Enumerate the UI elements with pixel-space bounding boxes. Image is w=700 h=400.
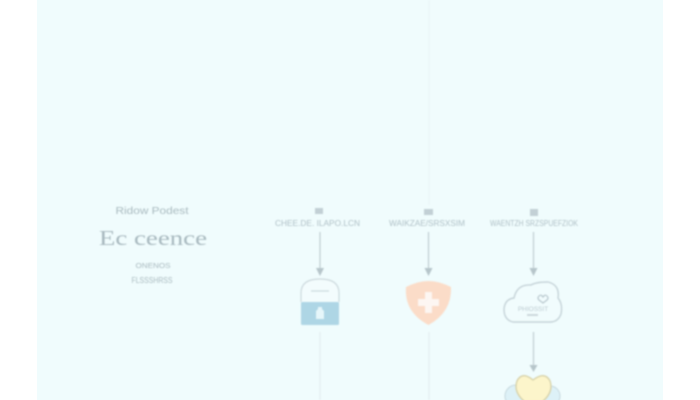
icon: small calendar (315, 208, 323, 214)
main title: Ec ceence (99, 226, 207, 250)
icon: cloud: PHIOSSIT (518, 306, 548, 313)
connector down (428, 332, 430, 400)
subtitle line two: FLSSSHRSS (132, 276, 172, 285)
icon: lock bag (301, 279, 339, 325)
icon: medical shield (406, 281, 451, 325)
top connector (428, 0, 430, 205)
connector down (319, 332, 321, 400)
arrow (530, 232, 538, 276)
left title block (99, 205, 207, 285)
icon: small document (530, 209, 538, 216)
icon: small briefcase (424, 209, 433, 215)
column three: label, arrows, cloud and heart icons (490, 209, 579, 400)
arrow (316, 232, 324, 276)
eyebrow heading: Ridow Podest (116, 205, 189, 217)
column label: WAIKZAE/SRSXSIM (389, 219, 465, 228)
arrow (530, 332, 538, 372)
column label: WAENTZH SRZSPUEFZIOK (490, 219, 579, 228)
column label: CHEE.DE. ILAPO.LCN (275, 218, 360, 228)
column two: label, arrow and shield icon (389, 0, 465, 400)
icon: heart cluster (505, 376, 560, 400)
column one: label, arrow and lock icon (275, 208, 360, 400)
arrow (424, 232, 432, 276)
icon: cloud (504, 282, 562, 322)
subtitle line one: ONENOS (136, 261, 170, 270)
